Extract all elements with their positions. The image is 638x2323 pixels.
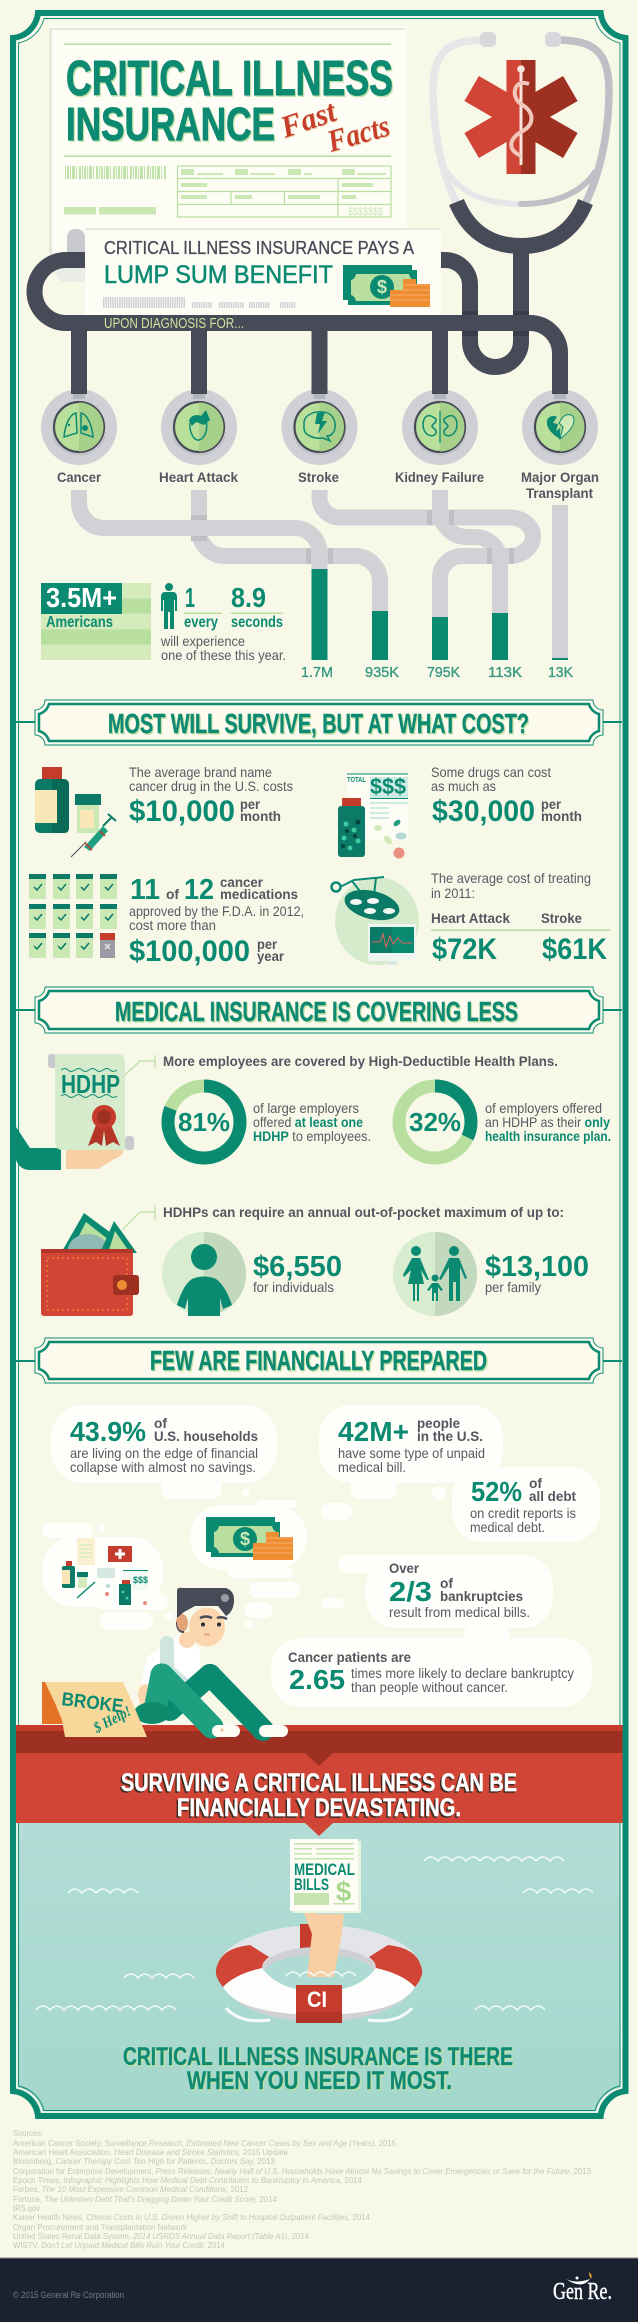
chart: 32 percent donut: 32%: [409, 1107, 461, 1137]
heading: surviving a critical illness: SURVIVING A CRITICAL ILLNESS CAN BE: [121, 1769, 517, 1797]
text: cost of treating: Stroke: [541, 910, 582, 926]
text: 52 percent: of: [529, 1475, 542, 1491]
title: [66, 52, 393, 150]
title: CRITICAL ILLNESS: [66, 52, 393, 106]
text: average brand name: cancer drug in the U.S. costs: [129, 778, 293, 794]
text: 81 percent: HDHP to employees.: [253, 1128, 371, 1144]
condition labels: Major Organ: [521, 469, 599, 485]
icon: total bill and pills: [338, 774, 408, 858]
sources: Sources:: [13, 2128, 43, 2138]
text: 2.65 times: times more likely to declare bankruptcy: [351, 1665, 574, 1681]
chart: incidence tubes and bars: 113K: [488, 664, 522, 681]
CI block: [296, 1985, 342, 2023]
text: cost of treating: The average cost of treating: [431, 870, 591, 886]
text: two thirds: of: [440, 1575, 453, 1591]
icon: medical items in thought cloud: [62, 1538, 148, 1605]
heading: most will survive: [16, 700, 622, 745]
text: 52 percent: on credit reports is: [470, 1505, 576, 1521]
title paper: [49, 26, 407, 254]
chart: incidence tubes and bars: 935K: [365, 664, 399, 681]
sitting body: [137, 1633, 200, 1703]
condition labels: Transplant: [526, 485, 593, 501]
heading: few are financially prepared: FEW ARE FINANCIALLY PREPARED: [150, 1345, 487, 1376]
text: 42M+: in the U.S.: [417, 1428, 483, 1444]
text: 11 of 12: cancer: [220, 874, 264, 890]
icon: medical items in thought cloud: $$$: [133, 1575, 148, 1585]
text: two thirds: bankruptcies: [440, 1588, 523, 1604]
text: 43.9 percent: U.S. households: [154, 1428, 258, 1444]
chart: 32 percent donut: [399, 1086, 471, 1158]
text: cost of treating: Heart Attack: [431, 910, 510, 926]
text: 2.65 times: [288, 1649, 574, 1695]
icon: family: [393, 1232, 477, 1316]
heading: surviving a critical illness: FINANCIALLY DEVASTATING.: [177, 1794, 461, 1822]
condition labels: Heart Attack: [159, 469, 238, 485]
stat: 13,100: $13,100: [485, 1251, 589, 1283]
text: some drugs: Some drugs can cost: [431, 764, 551, 780]
text: some drugs: as much as: [431, 778, 496, 794]
text: 42M+: have some type of unpaid: [338, 1445, 485, 1461]
icon: medicine bottles and syringe: [35, 767, 116, 857]
text: some drugs: month: [541, 808, 582, 824]
stat: 1 every 8.9 seconds: will experience: [160, 633, 245, 649]
sources: United States Renal Data System, 2014 USRDS Annual Data Report (Table A1), 2014: [13, 2231, 309, 2241]
scroll end of banner: [50, 229, 85, 282]
text: 43.9 percent: 43.9%: [70, 1416, 146, 1447]
text: average brand name: per: [240, 796, 260, 812]
waves: [36, 1857, 593, 2010]
text: 43.9 percent: [70, 1415, 258, 1475]
text: 52 percent: medical debt.: [470, 1519, 545, 1535]
text: 43.9 percent: collapse with almost no savings.: [70, 1459, 256, 1475]
sources: Epoch Times, Infographic Highlights How Medical Debt Contributes to Bankruptcy in America, 2014: [13, 2175, 362, 2185]
icon: heart attack: [161, 385, 237, 465]
sources: American Cancer Society, Surveillance Research, Estimated New Cancer Cases by Sex and Age (Years), 2015: [13, 2138, 396, 2148]
text: average brand name: month: [240, 808, 281, 824]
icon: cash and coins: [343, 265, 430, 307]
text: HDHP heading: More employees are covered by High-Deductible Health Plans.: [163, 1053, 558, 1069]
sources: Forbes, The 10 Most Expensive Common Medical Conditions, 2012: [13, 2184, 248, 2194]
logo: Gen Re: [553, 2272, 612, 2305]
icon: hand holding HDHP document: HDHP: [61, 1069, 120, 1099]
closing panels: red band and water: [10, 1725, 630, 2123]
stat: 3.5M+ Americans: Americans: [46, 614, 113, 631]
decorative thought clouds: [42, 1405, 600, 1707]
sources: American Heart Association, Heart Disease and Stroke Statistics, 2015 Update: [13, 2147, 288, 2157]
text: 11 of 12: per: [257, 936, 277, 952]
chart: incidence tubes and bars: 1.7M: [301, 664, 333, 681]
icon: total bill and pills: TOTAL: [347, 775, 366, 784]
condition labels: Cancer: [57, 469, 102, 485]
sources: IRS.gov: [13, 2203, 41, 2213]
text: two thirds: [389, 1560, 530, 1620]
sign: broke help: $ Help!: [91, 1704, 134, 1737]
red band triangles: [305, 1753, 333, 1836]
heading: lump sum: LUMP SUM BENEFIT: [104, 261, 333, 289]
stethoscope: [35, 32, 609, 394]
text: 43.9 percent: of: [154, 1415, 167, 1431]
stat: 3.5M+ Americans: 3.5M+: [46, 582, 117, 613]
sign: broke help: [42, 1682, 147, 1737]
text: 81 percent: [253, 1100, 371, 1144]
text: cost of treating: [431, 870, 611, 966]
text: 52 percent: 52%: [471, 1476, 522, 1507]
title paper: $$$$$$$: [348, 206, 383, 218]
text: 81 percent: of large employers: [253, 1100, 359, 1116]
medical bills: [290, 1839, 361, 1913]
text: 32 percent: an HDHP as their only: [485, 1114, 610, 1130]
barcode: [65, 166, 167, 179]
condition labels: Stroke: [298, 469, 339, 485]
stat: 1 every 8.9 seconds: 8.9: [231, 582, 266, 613]
icon: cash in thought cloud: $: [240, 1529, 250, 1549]
text: out-of-pocket heading: HDHPs can require an annual out-of-pocket maximum of up to:: [163, 1204, 564, 1220]
stat: 3.5M+ Americans: [41, 582, 151, 660]
text: two thirds: Over: [389, 1560, 420, 1576]
chart: incidence tubes and bars: [79, 490, 573, 681]
barcode strip: [103, 302, 296, 305]
text: 11 of 12: 11: [130, 874, 160, 906]
illustration: broke man: [42, 1588, 288, 1737]
icon: surgical lamp and monitor: [332, 877, 419, 965]
dark tubing: [441, 202, 586, 367]
form table: [178, 166, 391, 217]
subtitle: Fast Facts: Facts: [322, 108, 393, 159]
stat: 1 every 8.9 seconds: seconds: [231, 614, 283, 631]
stat: 6,550: $6,550: [253, 1251, 342, 1283]
heading: insurance is there: [123, 2043, 513, 2095]
chart: incidence tubes and bars: 13K: [548, 664, 573, 681]
icon: wallet with cash: [41, 1205, 155, 1316]
chart: 81 percent donut: [168, 1086, 240, 1158]
medical bills: BILLS: [294, 1875, 329, 1894]
icon: cash in thought cloud: [206, 1517, 293, 1560]
sources: Kaiser Health News, Chemo Costs in U.S. Driven Higher by Shift to Hospital Outpatient Facilities, 2014: [13, 2212, 370, 2222]
text: 11 of 12: cost more than: [129, 917, 216, 933]
icon: hand holding HDHP document: [16, 1054, 134, 1170]
text: upon diagnosis: UPON DIAGNOSIS FOR...: [104, 316, 244, 332]
icon: cash and coins: $: [377, 277, 387, 297]
chart: incidence tubes and bars: 795K: [427, 664, 460, 681]
heading: insurance is there: WHEN YOU NEED IT MOST.: [187, 2067, 452, 2095]
stat: 13,100: per family: [485, 1279, 541, 1295]
text: 11 of 12: [129, 874, 304, 968]
icon: total bill and pills: $$$: [370, 774, 406, 799]
text: two thirds: result from medical bills.: [389, 1604, 530, 1620]
condition labels: Kidney Failure: [395, 469, 484, 485]
text: average brand name: The average brand name: [129, 764, 272, 780]
icon: life ring with arm and medical bills: [216, 1839, 422, 2023]
heading: medical insurance: [16, 987, 622, 1033]
text: 11 of 12: year: [257, 948, 285, 964]
stat: 1 every 8.9 seconds: [160, 582, 286, 663]
icon: star of life: [464, 60, 578, 174]
text: 42M+: [338, 1415, 485, 1475]
title: INSURANCE: [66, 98, 275, 150]
text: 11 of 12: medications: [220, 886, 298, 902]
icon: person: [161, 583, 177, 629]
sources: Corporation for Enterprise Development, Press Releases: Nearly Half of U.S. Households Have Almost No Savings to Cover Emergencies or Save for the Future, 2013: [13, 2166, 591, 2176]
text: average brand name: [129, 764, 293, 828]
text: 52 percent: all debt: [529, 1488, 576, 1504]
text: 11 of 12: of: [166, 886, 179, 902]
icon: pill bottles grid: [29, 874, 117, 958]
text: cost of treating: $61K: [542, 933, 607, 966]
footer bar: [0, 2258, 638, 2322]
icon: cancer lungs: [41, 385, 117, 465]
heading: surviving a critical illness: [121, 1769, 517, 1822]
heading: insurance is there: CRITICAL ILLNESS INSURANCE IS THERE: [123, 2043, 513, 2071]
text: 32 percent: health insurance plan.: [485, 1128, 611, 1144]
text: 43.9 percent: are living on the edge of financial: [70, 1445, 258, 1461]
heading: few are financially prepared: [16, 1338, 622, 1383]
icon: stroke brain: [282, 385, 358, 465]
medical bills: MEDICAL: [294, 1860, 355, 1879]
heading: pays a: CRITICAL ILLNESS INSURANCE PAYS A: [104, 237, 415, 258]
text: 2.65 times: 2.65: [289, 1664, 345, 1695]
text: some drugs: per: [541, 796, 561, 812]
text: HDHP heading: [125, 1053, 558, 1075]
chart: 81 percent donut: 81%: [178, 1107, 230, 1137]
text: 32 percent: of employers offered: [485, 1100, 602, 1116]
stat: 1 every 8.9 seconds: 1: [185, 582, 195, 613]
sources: Bloomberg, Cancer Therapy Cost Too High for Patients, Doctors Say, 2013: [13, 2156, 275, 2166]
text: 42M+: medical bill.: [338, 1459, 406, 1475]
condition labels: [57, 469, 599, 501]
text: 42M+: 42M+: [338, 1416, 409, 1447]
text: cost of treating: $72K: [432, 933, 497, 966]
stat: 1 every 8.9 seconds: every: [184, 614, 218, 631]
sign: broke help: BROKE: [60, 1689, 124, 1718]
panel: lump sum benefit: [85, 228, 441, 315]
main tube with branches: [35, 260, 560, 394]
subtitle: Fast Facts: [275, 93, 393, 159]
text: some drugs: $30,000: [432, 795, 535, 828]
icon: individual: [162, 1232, 246, 1316]
text: cost of treating: in 2011:: [431, 885, 475, 901]
sources: WISTV, Don't Let Unpaid Medical Bills Ruin Your Credit, 2014: [13, 2240, 225, 2250]
text: 11 of 12: $100,000: [129, 935, 250, 968]
icon: organ transplant heart: [522, 385, 598, 465]
text: 2.65 times: than people without cancer.: [351, 1679, 508, 1695]
arm: [302, 1906, 344, 1977]
text: 42M+: people: [417, 1415, 460, 1431]
text: 32 percent: [485, 1100, 611, 1144]
sources: Fortune, The Unknown Debt That's Dragging Down Your Credit Score, 2014: [13, 2194, 277, 2204]
text: 11 of 12: 12: [184, 874, 214, 906]
ear tubes: [433, 40, 609, 204]
subtitle: Fast Facts: Fast: [275, 93, 342, 145]
stat: 6,550: for individuals: [253, 1279, 334, 1295]
text: average brand name: $10,000: [129, 795, 235, 828]
text: 11 of 12: approved by the F.D.A. in 2012,: [129, 903, 304, 919]
sources: [13, 2128, 591, 2250]
logo: Gen Re: Gen Re.: [553, 2279, 612, 2305]
text: 2.65 times: Cancer patients are: [288, 1649, 411, 1665]
icon: kidney failure: [402, 385, 478, 465]
head: [176, 1614, 188, 1632]
medical bills: $: [336, 1876, 352, 1907]
text: two thirds: 2/3: [389, 1576, 432, 1607]
text: some drugs: [431, 764, 582, 828]
stat: 1 every 8.9 seconds: one of these this year.: [161, 647, 286, 663]
icon: life ring with arm and medical bills: CI: [307, 1987, 327, 2012]
text: 81 percent: offered at least one: [253, 1114, 363, 1130]
footer bar: © 2015 General Re Corporation: [13, 2290, 124, 2301]
text: 52 percent: [470, 1475, 576, 1535]
sources: Organ Procurement and Transplantation Network: [13, 2222, 188, 2232]
